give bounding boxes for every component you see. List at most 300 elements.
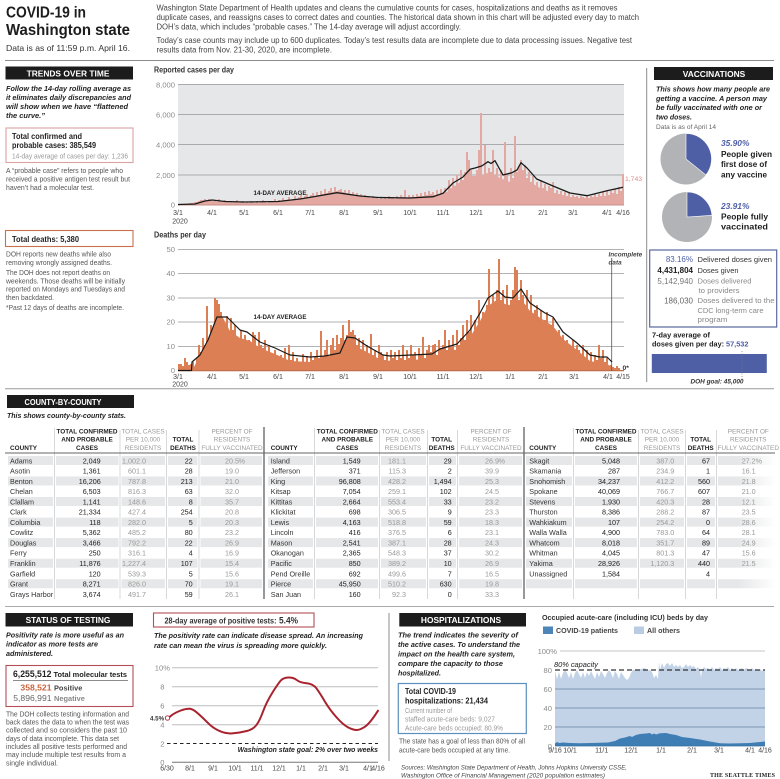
table: counties A-G: COUNTY bbox=[10, 445, 38, 452]
table: counties S-Y: 28.6 bbox=[742, 518, 756, 527]
table: counties S-Y: Spokane bbox=[529, 487, 558, 496]
x axis: beds: 4/1 bbox=[745, 748, 755, 754]
x axis: cases: 9/1 bbox=[373, 210, 383, 217]
title: Washington state bbox=[6, 22, 130, 39]
x axis: cases: 4/1 bbox=[602, 210, 612, 217]
intro text: duplicate cases, and reassigns cases to correct dates and counties. The historical data shown in this chart will be adjusted every day to match bbox=[156, 13, 639, 22]
table: counties A-G: 16.9 bbox=[225, 549, 239, 558]
testing note bbox=[6, 709, 129, 768]
x axis: cases: 3/1 bbox=[568, 210, 578, 217]
table: counties A-G: % bbox=[239, 456, 246, 465]
table: counties I-S: San Juan bbox=[271, 590, 301, 599]
x axis: deaths bbox=[172, 374, 630, 389]
y axis: beds: 100% bbox=[538, 647, 557, 656]
fully vaccinated label: vaccinated bbox=[721, 222, 768, 232]
x axis: positivity: 12/1 bbox=[272, 766, 286, 772]
sources: Sources: Washington State Department of Health, Johns Hopkins University CSSE, bbox=[401, 764, 627, 772]
x axis: deaths: 11/1 bbox=[436, 374, 450, 381]
first dose label: first dose of bbox=[721, 159, 767, 169]
callout: total hospitalizations bbox=[398, 684, 526, 734]
7-day average label: 57,532 bbox=[726, 340, 748, 348]
callout: total tests: Positive bbox=[54, 684, 82, 692]
table: counties A-G: 1,361 bbox=[83, 467, 101, 476]
incomplete data marker bbox=[608, 252, 643, 371]
callout: total hospitalizations: Current number of bbox=[405, 708, 452, 715]
table: counties A-G: 316.1 bbox=[128, 549, 146, 558]
table: counties S-Y: 1,584 bbox=[602, 569, 620, 578]
x axis: positivity bbox=[160, 766, 385, 772]
table: counties A-G: 20.5 bbox=[225, 456, 239, 465]
table: counties A-G: 254 bbox=[181, 508, 193, 517]
table: counties S-Y: Yakima bbox=[529, 559, 553, 568]
table: counties S-Y: 4,045 bbox=[602, 549, 620, 558]
hospitalizations intro: the active cases. To understand the bbox=[398, 640, 521, 649]
testing note: days of data incomplete. This data set bbox=[6, 734, 119, 743]
table: counties A-G: DEATHS bbox=[170, 445, 197, 452]
trends intro bbox=[6, 84, 132, 120]
table: counties S-Y: 440 bbox=[698, 559, 710, 568]
table: counties A-G: 35.7 bbox=[225, 497, 239, 506]
x axis: beds bbox=[548, 748, 772, 754]
fully vaccinated label: 23.91% bbox=[720, 201, 750, 211]
y axis: cases: 6,000 bbox=[156, 110, 175, 120]
x axis: positivity: 10/1 bbox=[228, 766, 242, 772]
table: counties S-Y: 1,930 bbox=[602, 497, 620, 506]
daily death bars bbox=[178, 259, 624, 371]
table: counties S-Y: Thurston bbox=[529, 508, 558, 517]
table: counties S-Y: PER 10,000 bbox=[645, 437, 680, 444]
deaths note: The DOH does not report deaths on bbox=[6, 268, 110, 277]
testing note: includes all positive tests performed and bbox=[6, 742, 127, 751]
table: counties A-G: 4 bbox=[189, 549, 193, 558]
x axis: deaths: 7/1 bbox=[305, 374, 315, 381]
y axis: deaths: 50 bbox=[167, 245, 175, 254]
table: counties I-S: RESIDENTS bbox=[473, 437, 509, 444]
first dose label: any vaccine bbox=[721, 170, 767, 180]
y axis: deaths: 20 bbox=[167, 318, 175, 326]
table: counties A-G: Cowlitz bbox=[10, 528, 34, 537]
y axis: deaths: 10 bbox=[167, 342, 175, 351]
table: counties I-S: 1,494 bbox=[434, 477, 452, 486]
callout: 28-day average positivity: 5.4% bbox=[279, 616, 298, 626]
table: counties I-S: 698 bbox=[349, 508, 361, 517]
14-day average line: cases bbox=[178, 161, 623, 204]
table: counties A-G: 5,362 bbox=[83, 528, 101, 537]
x axis: positivity: 11/1 bbox=[250, 766, 264, 772]
table: counties I-S: 33.3 bbox=[485, 590, 499, 599]
table: counties I-S: 9 bbox=[448, 508, 452, 517]
table: counties I-S: 259.1 bbox=[388, 487, 406, 496]
table: counties S-Y: 34,237 bbox=[598, 477, 620, 486]
table: counties A-G: 21,334 bbox=[79, 508, 101, 517]
table: counties A-G: 19.1 bbox=[225, 580, 239, 589]
hospitalization goal note: The state has a goal of less than 80% of all bbox=[399, 736, 525, 746]
x axis: cases: 1/1 bbox=[505, 210, 515, 217]
callout: total tests: 5,896,991 bbox=[13, 693, 52, 703]
panel: trends over time sidebar bbox=[5, 66, 133, 312]
table: counties A-G: 6,503 bbox=[83, 487, 101, 496]
table: counties S-Y: 560 bbox=[698, 477, 710, 486]
table: counties I-S: 10 bbox=[444, 559, 452, 568]
y axis: cases: 8,000 bbox=[156, 80, 175, 90]
table: counties A-G: 5 bbox=[189, 569, 193, 578]
testing note: may include multiple test results from a bbox=[6, 750, 127, 759]
table: counties I-S: 92.3 bbox=[392, 590, 406, 599]
table: counties I-S: 387.1 bbox=[388, 538, 406, 548]
table: counties A-G: 70 bbox=[185, 580, 193, 589]
y axis: deaths bbox=[167, 245, 175, 375]
deaths note: removing wrongly assigned deaths. bbox=[6, 258, 112, 267]
chart: occupied beds bbox=[538, 613, 772, 754]
x axis: deaths: 2020 bbox=[172, 382, 188, 389]
table: counties S-Y: 47 bbox=[702, 549, 710, 558]
hospitalization goal note bbox=[399, 736, 525, 754]
table: counties I-S: 26.9 bbox=[485, 456, 499, 465]
deaths note: DOH reports new deaths while also bbox=[6, 250, 111, 259]
x axis: cases: 12/1 bbox=[469, 210, 483, 217]
y axis: deaths: 30 bbox=[167, 294, 175, 302]
table: counties I-S: 30.2 bbox=[485, 549, 499, 558]
label: 14-day average: 14-DAY AVERAGE bbox=[254, 314, 306, 321]
table: counties I-S: 692 bbox=[349, 569, 361, 578]
x axis: deaths: 2/1 bbox=[538, 374, 548, 381]
deaths note: reported on Mondays and Tuesdays and bbox=[6, 284, 125, 294]
callout: doses: Doses delivered to the bbox=[698, 296, 774, 305]
testing note: The DOH collects testing information and bbox=[6, 709, 129, 718]
callout: total hospitalizations: Acute-care beds occupied: 80.9% bbox=[405, 726, 503, 732]
table: counties S-Y: 28 bbox=[702, 497, 710, 506]
table: counties I-S: TOTAL bbox=[431, 437, 452, 444]
hospitalizations intro bbox=[398, 630, 521, 678]
table: counties I-S: CASES bbox=[336, 445, 359, 452]
title bbox=[6, 4, 130, 39]
table: counties S-Y: 21.8 bbox=[742, 477, 756, 486]
table: counties A-G: 485.2 bbox=[128, 528, 146, 537]
table: counties S-Y: Wahkiakum bbox=[529, 518, 567, 527]
table: counties S-Y: 287 bbox=[608, 467, 620, 476]
COVID-19 patients area bbox=[555, 733, 765, 746]
table: counties A-G: Clark bbox=[10, 508, 27, 517]
heading: hospitalizations bbox=[399, 613, 526, 626]
table: counties I-S: 7 bbox=[448, 569, 452, 578]
table: counties A-G: Grant bbox=[10, 580, 28, 589]
table: counties S-Y: 27.2 bbox=[742, 456, 756, 465]
table: counties A-G: 15.4 bbox=[225, 559, 239, 568]
callout: 28-day average positivity bbox=[154, 613, 314, 627]
x axis: deaths: 10/1 bbox=[403, 374, 417, 381]
x axis: cases: 2/1 bbox=[538, 210, 548, 217]
chart title: beds: Occupied acute-care (including ICU) beds by day bbox=[542, 613, 709, 622]
table: counties I-S: 24.3 bbox=[485, 538, 499, 548]
table: counties A-G: 213 bbox=[181, 477, 193, 486]
table: counties A-G: 26.1 bbox=[225, 590, 239, 599]
hospitalizations intro: impact on the health care system, bbox=[398, 650, 515, 658]
callout: doses: 83.16% bbox=[666, 255, 693, 264]
callout: doses: 4,431,804 bbox=[657, 266, 694, 275]
testing intro: Positivity rate is more useful as an bbox=[6, 630, 124, 639]
table: counties A-G: 8,271 bbox=[83, 580, 101, 589]
y axis: deaths: 40 bbox=[167, 269, 175, 278]
y axis: deaths: 0 bbox=[171, 366, 175, 375]
table: counties S-Y: 4 bbox=[706, 569, 710, 578]
x axis: deaths: 3/1 bbox=[569, 374, 579, 381]
7-day average label: doses given per day: bbox=[652, 340, 724, 348]
table: counties I-S: PERCENT OF bbox=[470, 428, 512, 435]
table: counties S-Y: Stevens bbox=[529, 497, 556, 506]
table: counties I-S: 4,163 bbox=[343, 518, 361, 527]
vaccinations intro bbox=[655, 84, 771, 122]
callout: doses bbox=[650, 250, 777, 327]
label: latest cases: 1,743 bbox=[625, 176, 642, 183]
table: counties S-Y: 23.5 bbox=[742, 508, 756, 517]
table: counties S-Y: 67 bbox=[702, 456, 710, 465]
table: counties I-S: 181.1 bbox=[388, 456, 406, 465]
x axis: beds: 9/16 bbox=[548, 748, 562, 754]
callout: doses: Delivered doses given bbox=[698, 255, 772, 264]
table: counties S-Y: 28,926 bbox=[598, 559, 620, 568]
callout: doses: 5,142,940 bbox=[657, 277, 694, 286]
hospitalizations intro: compare the capacity to those bbox=[398, 659, 504, 668]
table: counties A-G: RESIDENTS bbox=[214, 437, 250, 444]
table: counties I-S: 23.1 bbox=[485, 528, 499, 537]
table: counties I-S: TOTAL CONFIRMED bbox=[317, 428, 378, 435]
table: counties I-S: Kitsap bbox=[271, 487, 291, 496]
table: counties I-S: 0 bbox=[448, 590, 452, 599]
deaths note bbox=[5, 250, 125, 312]
table: counties A-G: Garfield bbox=[10, 569, 35, 578]
goal line bbox=[167, 742, 378, 744]
positivity line bbox=[168, 677, 378, 733]
table: counties S-Y: 5,048 bbox=[602, 456, 620, 465]
hospitalizations intro: The trend indicates the severity of bbox=[398, 630, 519, 639]
table: counties A-G: 28 bbox=[185, 467, 193, 476]
table: counties I-S: 2,365 bbox=[343, 549, 361, 558]
deaths note: weekends. Those deaths will be initially bbox=[5, 276, 125, 286]
table: counties I-S: 416 bbox=[349, 528, 361, 537]
table: counties A-G: 32.0 bbox=[225, 487, 239, 496]
x axis: beds: 11/1 bbox=[595, 748, 608, 754]
x axis: deaths: 3/1 bbox=[173, 374, 183, 381]
callout: doses: Doses given bbox=[698, 266, 738, 275]
table: counties I-S: 16.5 bbox=[485, 569, 499, 578]
probable case note bbox=[6, 166, 130, 192]
callout: total tests bbox=[6, 666, 133, 706]
table: counties S-Y: 766.7 bbox=[656, 487, 674, 496]
chart title: deaths: Deaths per day bbox=[154, 230, 207, 240]
intro text bbox=[156, 4, 639, 54]
x axis: cases bbox=[172, 210, 630, 225]
table: counties I-S: % bbox=[499, 456, 506, 465]
callout: total cases: 14-day average of cases per day: 1,236 bbox=[12, 154, 128, 160]
panel: county-by-county bbox=[5, 395, 779, 600]
table: counties I-S: 499.6 bbox=[388, 569, 406, 578]
x axis: beds: 2/1 bbox=[687, 748, 697, 754]
table: counties A-G: Chelan bbox=[10, 487, 33, 496]
x axis: positivity: 2/1 bbox=[318, 766, 328, 772]
table: counties I-S: 96,808 bbox=[339, 477, 361, 486]
heading: vaccinations: VACCINATIONS bbox=[683, 69, 746, 79]
table: counties S-Y: Walla Walla bbox=[529, 528, 567, 537]
table: counties S-Y: DEATHS bbox=[688, 445, 714, 452]
table: counties I-S: Island bbox=[271, 456, 290, 465]
intro text: Today’s case counts may include up to 600 duplicates. Today’s test results data are incomplete due to data processing issues. Negative test bbox=[156, 36, 633, 45]
table: counties I-S: DEATHS bbox=[429, 445, 455, 452]
deaths note: then backdated. bbox=[6, 293, 54, 302]
table: counties A-G: CASES bbox=[76, 445, 99, 452]
table: counties S-Y: 254.2 bbox=[656, 518, 674, 527]
table: counties A-G: RESIDENTS bbox=[125, 445, 161, 452]
positivity text: The positivity rate can indicate disease spread. An increasing bbox=[154, 631, 363, 640]
table: counties A-G: Adams bbox=[10, 456, 33, 465]
heading: county-by-county: COUNTY-BY-COUNTY bbox=[24, 397, 102, 407]
x axis: deaths: 12/1 bbox=[469, 374, 483, 381]
panel: hospitalizations bbox=[398, 613, 526, 754]
table: counties I-S: 376.5 bbox=[388, 528, 406, 537]
table: counties I-S: RESIDENTS bbox=[385, 445, 421, 452]
table: counties I-S: 1,549 bbox=[343, 456, 361, 465]
table: counties A-G: Grays Harbor bbox=[10, 590, 54, 599]
death bars body bbox=[192, 299, 620, 371]
table: counties I-S: 39.9 bbox=[485, 467, 499, 476]
table: counties S-Y: 21.0 bbox=[742, 487, 756, 496]
table: counties S-Y: 1 bbox=[706, 467, 710, 476]
table: counties A-G: 11,876 bbox=[79, 559, 101, 568]
80% capacity label: 80% capacity bbox=[554, 660, 599, 669]
table: counties A-G: Asotin bbox=[10, 467, 30, 476]
table: counties A-G: TOTAL CASES bbox=[121, 428, 165, 435]
x axis: cases: 8/1 bbox=[339, 210, 349, 217]
callout: total hospitalizations: hospitalizations: 21,434 bbox=[405, 696, 489, 706]
label: 14-day average: 14-DAY AVERAGE bbox=[254, 190, 306, 197]
x axis: positivity: 3/1 bbox=[339, 766, 349, 772]
heading: hospitalizations: HOSPITALIZATIONS bbox=[421, 615, 501, 625]
x axis: deaths: 5/1 bbox=[239, 374, 249, 381]
testing intro: administered. bbox=[6, 649, 53, 658]
y axis: beds: 0 bbox=[548, 742, 552, 751]
testing note: single individual. bbox=[6, 758, 58, 768]
table: counties I-S: Klickitat bbox=[271, 508, 295, 517]
trends intro: it eliminates daily discrepancies and bbox=[6, 93, 131, 102]
daily case bars bbox=[178, 113, 624, 205]
table: counties A-G: 2,049 bbox=[83, 456, 101, 465]
x axis: deaths: 9/1 bbox=[373, 374, 383, 381]
probable case note: received a positive antigen test result but bbox=[6, 174, 130, 184]
table: counties S-Y: 420.3 bbox=[656, 497, 674, 506]
callout: doses: program bbox=[698, 315, 728, 324]
table: counties I-S: 850 bbox=[349, 559, 361, 568]
table: counties I-S: FULLY VACCINATED bbox=[460, 445, 522, 452]
table: counties A-G: 107 bbox=[181, 559, 193, 568]
table: counties I-S: 102 bbox=[440, 487, 452, 496]
table: counties I-S: 630 bbox=[440, 580, 452, 589]
callout: total hospitalizations: staffed acute-care beds: 9,027 bbox=[405, 716, 495, 724]
y axis: positivity: 10% bbox=[155, 664, 170, 672]
x axis: deaths: 6/1 bbox=[273, 374, 283, 381]
table: counties A-G: 59 bbox=[185, 590, 193, 599]
table: counties S-Y: 4,900 bbox=[602, 528, 620, 537]
table: counties I-S: Jefferson bbox=[271, 467, 300, 476]
table: counties I-S: 510.2 bbox=[388, 580, 406, 589]
y axis: cases: 4,000 bbox=[156, 140, 175, 150]
table: counties A-G: 3,466 bbox=[83, 538, 101, 548]
callout: total tests: Total molecular tests bbox=[54, 670, 127, 679]
x axis: positivity: 4/1 bbox=[363, 766, 373, 772]
y axis: positivity: 8 bbox=[160, 682, 164, 692]
heading: county-by-county bbox=[7, 395, 134, 408]
table: counties A-G: 8 bbox=[189, 497, 193, 506]
callout: doses: 186,030 bbox=[664, 296, 694, 305]
y axis: cases: 2,000 bbox=[156, 171, 175, 180]
table: counties A-G: TOTAL CONFIRMED bbox=[56, 428, 118, 435]
table: counties A-G: 80 bbox=[185, 528, 193, 537]
table: counties A-G: 20.3 bbox=[225, 518, 239, 527]
callout: total cases: probable cases: 385,549 bbox=[12, 141, 97, 150]
table: counties I-S: 25.3 bbox=[485, 477, 499, 486]
table: counties A-G: 491.7 bbox=[128, 590, 146, 599]
table: counties A-G: 1,002.0 bbox=[122, 456, 146, 465]
table: counties A-G: 20.8 bbox=[225, 508, 239, 517]
intro text: Washington State Department of Health updates and cleans the cumulative counts for cases, hospitalizations and deaths as it removes bbox=[156, 4, 618, 12]
table: counties S-Y: % bbox=[756, 456, 763, 465]
table: counties I-S: 45,950 bbox=[339, 580, 361, 589]
testing intro bbox=[6, 630, 124, 658]
heading: status of testing: STATUS OF TESTING bbox=[26, 615, 110, 625]
table: counties I-S: 2,541 bbox=[343, 538, 361, 548]
callout: doses: CDC long-term care bbox=[698, 306, 764, 315]
x axis: cases: 10/1 bbox=[403, 210, 417, 217]
heading: trends over time bbox=[6, 66, 133, 80]
table: counties A-G: 1,141 bbox=[83, 497, 101, 506]
hospitalization goal note: acute-care beds occupied at any time. bbox=[399, 746, 510, 754]
table: counties S-Y: TOTAL CONFIRMED bbox=[575, 428, 637, 435]
vaccinations intro: two doses. bbox=[656, 112, 692, 122]
table: counties S-Y: AND PROBABLE bbox=[580, 437, 632, 444]
callout: total tests: 6,255,512 bbox=[13, 669, 52, 679]
table: counties S-Y: 15.6 bbox=[742, 549, 756, 558]
title: COVID-19 in bbox=[6, 4, 86, 22]
table: counties S-Y: 16.1 bbox=[742, 467, 756, 476]
14-day average line: deaths bbox=[178, 289, 612, 370]
table: counties I-S: Pacific bbox=[271, 559, 292, 568]
callout: total cases: Total confirmed and bbox=[12, 132, 82, 141]
table: counties A-G: PERCENT OF bbox=[211, 428, 253, 435]
x axis: cases: 4/16 bbox=[616, 210, 630, 217]
table: counties A-G: Benton bbox=[10, 477, 33, 486]
callout: total deaths bbox=[6, 230, 133, 246]
chart: reported cases per day bbox=[154, 66, 642, 225]
table: counties I-S: Okanogan bbox=[271, 549, 304, 558]
x axis: cases: 3/1 bbox=[173, 210, 183, 217]
y axis: beds: 60 bbox=[544, 685, 552, 694]
pie: first dose 35.90% bbox=[660, 133, 712, 184]
testing note: back dates the data to when the test was bbox=[6, 718, 129, 726]
positivity text bbox=[154, 631, 363, 650]
deaths note: *Past 12 days of deaths are incomplete. bbox=[6, 303, 124, 312]
table: counties I-S: 26.9 bbox=[485, 559, 499, 568]
x axis: cases: 2020 bbox=[172, 218, 188, 225]
probable case note: A “probable case” refers to people who bbox=[6, 166, 123, 175]
table: counties S-Y: Snohomish bbox=[529, 477, 565, 486]
table: counties I-S: 2,664 bbox=[343, 497, 361, 506]
x axis: cases: 6/1 bbox=[273, 210, 283, 217]
table: counties I-S: COUNTY bbox=[271, 445, 298, 452]
table: counties A-G: 787.8 bbox=[128, 477, 146, 486]
table: counties A-G bbox=[8, 427, 264, 600]
bar: doses per day vs goal bbox=[652, 351, 767, 386]
table: counties I-S: 18.3 bbox=[485, 518, 499, 527]
pie: fully vaccinated 23.91% bbox=[662, 192, 712, 242]
table: counties S-Y: TOTAL CASES bbox=[640, 428, 684, 435]
